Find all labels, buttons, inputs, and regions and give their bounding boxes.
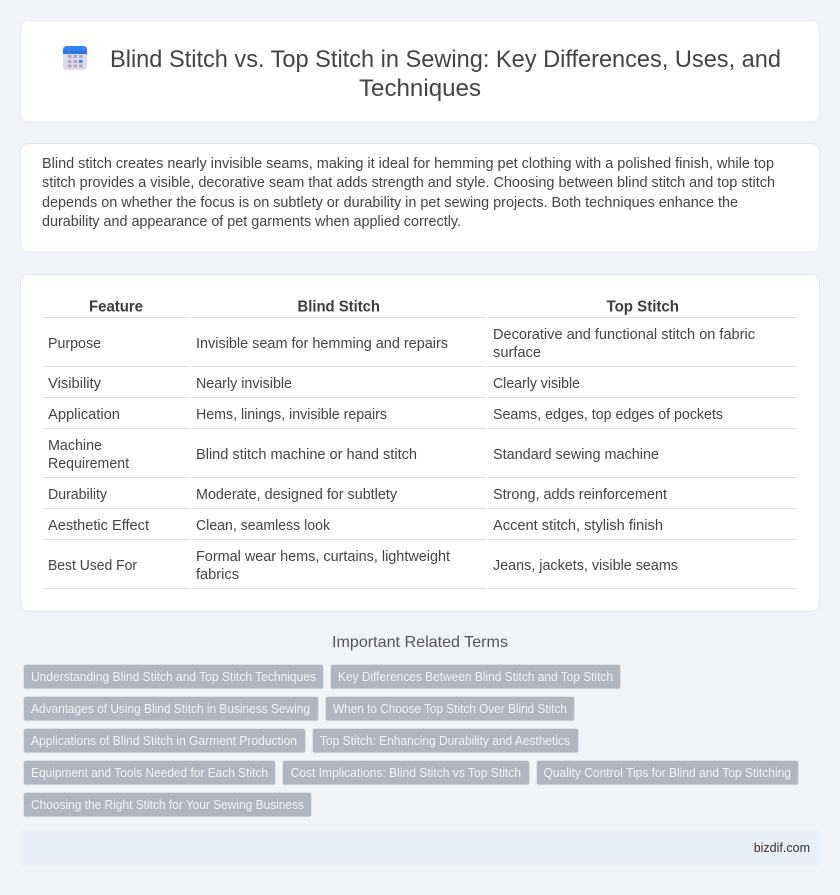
icon: calendar bbox=[63, 46, 87, 70]
tag: When to Choose Top Stitch Over Blind Stitch bbox=[333, 701, 567, 716]
table row: machine requirement bbox=[48, 438, 659, 472]
tag bbox=[24, 792, 312, 817]
table row: aesthetic effect bbox=[48, 518, 663, 534]
footer bbox=[20, 831, 820, 865]
tag: Cost Implications: Blind Stitch vs Top Stitch bbox=[290, 765, 521, 780]
table row: visibility bbox=[48, 376, 580, 392]
tag bbox=[536, 760, 798, 785]
table row: durability: Moderate, designed for subtlety bbox=[196, 487, 398, 503]
tag bbox=[282, 760, 530, 785]
title bbox=[110, 46, 781, 102]
text block: summary bbox=[42, 156, 775, 230]
table row: machine requirement: Standard sewing machine bbox=[493, 447, 659, 463]
tag bbox=[24, 664, 324, 689]
text block: summary: durability and appearance of pet garments when applied correctly. bbox=[42, 214, 461, 230]
panel: summary text bbox=[20, 144, 820, 252]
tag bbox=[326, 696, 574, 721]
table row: best used for bbox=[48, 549, 678, 583]
tag: Quality Control Tips for Blind and Top Stitching bbox=[544, 765, 791, 780]
table header row: Top Stitch bbox=[606, 298, 679, 316]
table row: purpose: surface bbox=[493, 345, 541, 361]
table row: best used for: fabrics bbox=[196, 567, 239, 583]
table row: visibility: Nearly invisible bbox=[196, 376, 292, 392]
table row: purpose: Decorative and functional stitch on fabric bbox=[493, 327, 755, 343]
tag: Choosing the Right Stitch for Your Sewing Business bbox=[31, 797, 304, 812]
table row: best used for: Jeans, jackets, visible seams bbox=[493, 558, 678, 574]
title: Techniques bbox=[359, 75, 481, 102]
table header row: Blind Stitch bbox=[298, 298, 380, 316]
tag bbox=[24, 760, 276, 785]
table row: best used for: Best Used For bbox=[48, 558, 137, 574]
table header row bbox=[89, 298, 679, 316]
tag: Applications of Blind Stitch in Garment Production bbox=[31, 733, 297, 748]
table row: application: Hems, linings, invisible repairs bbox=[196, 407, 387, 423]
tag: Understanding Blind Stitch and Top Stitch Techniques bbox=[31, 669, 316, 684]
footer: bizdif.com bbox=[754, 840, 810, 855]
tag bbox=[24, 696, 318, 721]
text block: summary: depends on whether the focus is on subtlety or durability in pet sewing projects. Both techniques enhance the bbox=[42, 195, 738, 211]
tag bbox=[24, 728, 306, 753]
tag bbox=[312, 728, 578, 753]
table row: visibility: Visibility bbox=[48, 376, 102, 392]
table row: purpose bbox=[48, 327, 755, 361]
text block: summary: stitch provides a visible, decorative seam that adds strength and style. Choosing between blind stitch and top stitch bbox=[42, 175, 775, 191]
title: Blind Stitch vs. Top Stitch in Sewing: Key Differences, Uses, and bbox=[110, 46, 781, 73]
table row: best used for: Formal wear hems, curtains, lightweight bbox=[196, 549, 450, 565]
panel: comparison table bbox=[20, 274, 820, 611]
table row: application: Application bbox=[48, 407, 120, 423]
tag bbox=[330, 664, 620, 689]
table row: visibility: Clearly visible bbox=[493, 376, 580, 392]
tag list: related terms bbox=[24, 664, 798, 817]
table row: purpose: Purpose bbox=[48, 336, 101, 352]
table row: aesthetic effect: Aesthetic Effect bbox=[48, 518, 149, 534]
table row: durability: Strong, adds reinforcement bbox=[493, 487, 667, 503]
table row: machine requirement: Requirement bbox=[48, 456, 129, 472]
panel: header bbox=[20, 20, 820, 122]
table row: durability bbox=[48, 487, 667, 503]
tag: Key Differences Between Blind Stitch and Top Stitch bbox=[338, 669, 613, 684]
heading: related terms: Important Related Terms bbox=[332, 634, 508, 651]
text block: summary: Blind stitch creates nearly invisible seams, making it ideal for hemming pet clothing with a polished finish, while top bbox=[42, 156, 774, 172]
table row: aesthetic effect: Clean, seamless look bbox=[196, 518, 331, 534]
tag: Advantages of Using Blind Stitch in Business Sewing bbox=[31, 701, 310, 716]
tag: Top Stitch: Enhancing Durability and Aesthetics bbox=[320, 733, 570, 748]
table row: application: Seams, edges, top edges of pockets bbox=[493, 407, 723, 423]
table row: machine requirement: Blind stitch machine or hand stitch bbox=[196, 447, 417, 463]
table header row: Feature bbox=[89, 298, 143, 316]
tag: Equipment and Tools Needed for Each Stitch bbox=[31, 765, 268, 780]
table row: aesthetic effect: Accent stitch, stylish finish bbox=[493, 518, 663, 534]
table row: purpose: Invisible seam for hemming and repairs bbox=[196, 336, 448, 352]
table row: machine requirement: Machine bbox=[48, 438, 102, 454]
table row: application bbox=[48, 407, 723, 423]
table row: durability: Durability bbox=[48, 487, 108, 503]
